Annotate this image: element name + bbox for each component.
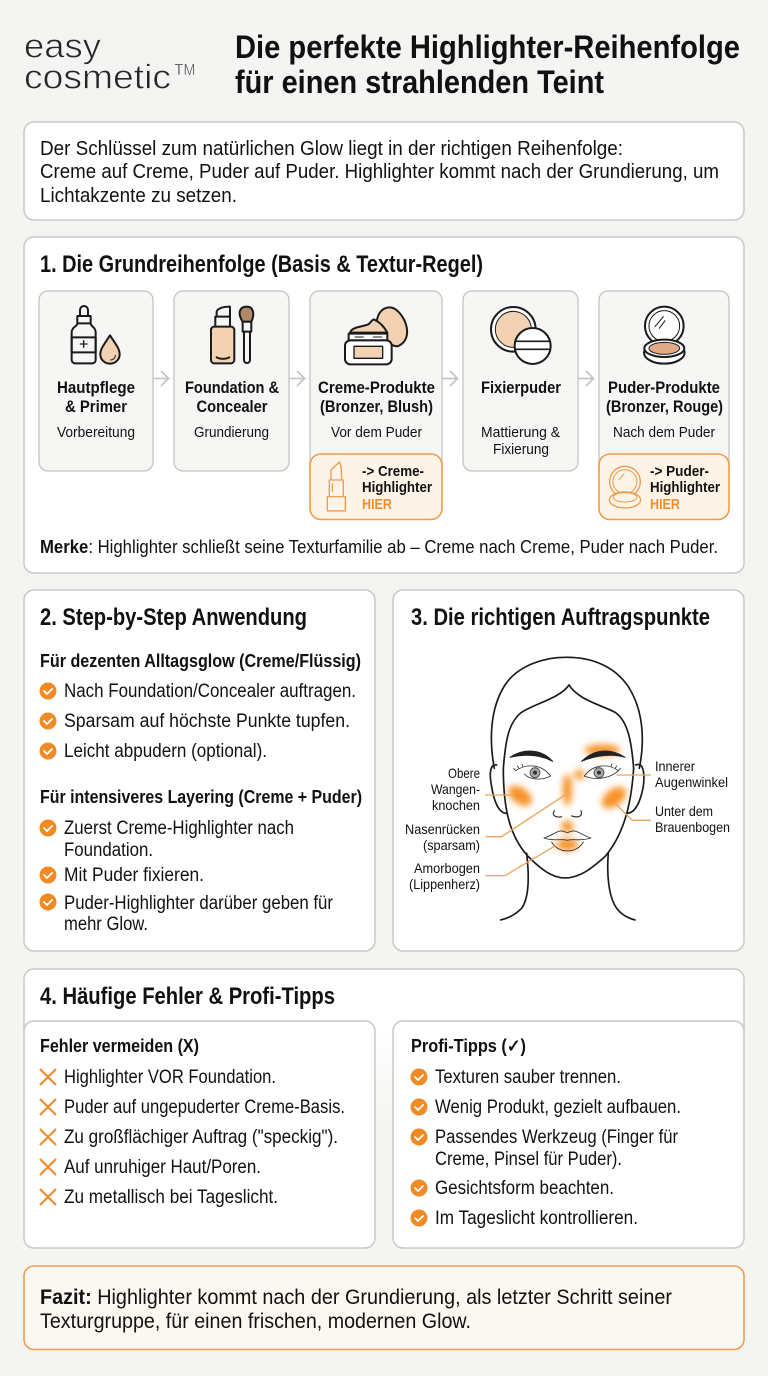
label: Innerer Augenwinkel: Innerer xyxy=(655,758,695,774)
label: Unter dem Brauenbogen xyxy=(655,803,730,835)
list item: mehr Glow. xyxy=(64,914,148,935)
step: Foundation & Concealer: Grundierung xyxy=(194,424,269,441)
step: Hautpflege & Primer: & Primer xyxy=(65,397,127,416)
list item: Puder auf ungepuderter Creme-Basis. xyxy=(64,1097,345,1118)
icon: lipstick xyxy=(327,462,345,511)
arrow xyxy=(578,371,594,386)
list item: Creme, Pinsel für Puder). xyxy=(435,1149,622,1170)
step: Hautpflege & Primer: Vorbereitung xyxy=(57,424,135,441)
label: Nasenrücken: Nasenrücken xyxy=(405,821,480,837)
list item: Auf unruhiger Haut/Poren. xyxy=(64,1157,261,1178)
callout: Creme-Highlighter hier xyxy=(310,454,442,520)
label: Innerer Augenwinkel: Augenwinkel xyxy=(655,774,728,790)
callout: Puder-Highlighter hier xyxy=(599,454,729,520)
step: Puder-Produkte: (Bronzer, Rouge) xyxy=(606,397,723,416)
label: Nasenrücken: (sparsam) xyxy=(423,837,480,853)
label: Amorbogen: Amorbogen xyxy=(414,860,480,876)
title: für einen strahlenden Teint xyxy=(235,64,604,100)
list item: Zu großflächiger Auftrag ("speckig"). xyxy=(64,1127,338,1148)
callout: Creme-Highlighter hier: Highlighter xyxy=(362,479,432,496)
label: Obere Wangenknochen xyxy=(431,765,480,813)
callout: Puder-Highlighter hier: HIER xyxy=(650,496,680,513)
callout: Puder-Highlighter hier: -> Puder- xyxy=(650,463,709,480)
list item: Wenig Produkt, gezielt aufbauen. xyxy=(435,1097,681,1118)
label: Amorbogen xyxy=(409,860,480,892)
list item: Zuerst Creme-Highlighter nach xyxy=(64,818,294,839)
icon: compact outline xyxy=(609,466,641,508)
label: Obere Wangenknochen: Obere xyxy=(448,765,480,781)
step: Fixierpuder xyxy=(463,291,578,471)
step: Fixierpuder: Mattierung & xyxy=(481,424,560,441)
label: Amorbogen: (Lippenherz) xyxy=(409,876,480,892)
step: Creme-Produkte: Vor dem Puder xyxy=(331,424,422,441)
label: Obere Wangenknochen: Wangen- xyxy=(431,781,480,797)
label: Unter dem Brauenbogen: Brauenbogen xyxy=(655,819,730,835)
step: Foundation & Concealer: Foundation & xyxy=(185,378,279,397)
panel: 2. Step-by-Step xyxy=(24,590,375,951)
step: Fixierpuder: Fixierpuder xyxy=(481,378,561,397)
sub-panel: Profi-Tipps xyxy=(393,1021,744,1248)
step: Creme-Produkte: (Bronzer, Blush) xyxy=(320,397,433,416)
arrow xyxy=(153,371,168,386)
list item: Sparsam auf höchste Punkte tupfen. xyxy=(64,711,350,732)
list item: Texturen sauber trennen. xyxy=(435,1067,621,1088)
callout: Creme-Highlighter hier: HIER xyxy=(362,496,392,513)
icon: cream jar and sponge xyxy=(345,307,407,364)
heading: section 2: 2. Step-by-Step Anwendung xyxy=(40,604,307,631)
label: Obere Wangenknochen: knochen xyxy=(432,797,480,813)
step: Hautpflege & Primer xyxy=(39,291,153,471)
list item: Passendes Werkzeug (Finger für xyxy=(435,1127,679,1148)
callout: Puder-Highlighter hier: Highlighter xyxy=(650,479,720,496)
label: Nasenrücken xyxy=(405,821,480,853)
icon: compact xyxy=(644,307,685,364)
arrow xyxy=(442,371,458,386)
nose xyxy=(553,811,582,817)
logo: easy cosmetic: cosmetic xyxy=(24,58,171,96)
list item: Im Tageslicht kontrollieren. xyxy=(435,1208,638,1229)
callout: Creme-Highlighter hier: -> Creme- xyxy=(362,463,424,480)
step: Fixierpuder: Fixierung xyxy=(493,441,549,458)
step: Foundation & Concealer xyxy=(174,291,289,471)
head outline xyxy=(490,657,644,920)
text: Merke: Merke: Highlighter schließt seine Texturfamilie ab – Creme nach Creme, Puder nach Puder. xyxy=(40,537,718,557)
panel: 1. Grundreihenfolge xyxy=(24,237,744,573)
label: Innerer Augenwinkel xyxy=(655,758,728,790)
subheading: Alltagsglow: Für dezenten Alltagsglow (Creme/Flüssig) xyxy=(40,651,361,671)
logo: easy cosmetic: easy xyxy=(24,28,102,66)
lips xyxy=(544,831,591,851)
panel: intro xyxy=(24,122,744,220)
icon: foundation bottle and brush xyxy=(211,307,253,363)
list item: Nach Foundation/Concealer auftragen. xyxy=(64,681,356,702)
panel: Fazit: Fazit: Highlighter kommt nach der Grundierung, als letzter Schritt seiner xyxy=(40,1286,672,1309)
step: Puder-Produkte: Puder-Produkte xyxy=(608,378,720,397)
face diagram xyxy=(485,657,651,920)
panel: 3. Auftragspunkte xyxy=(393,590,744,951)
list item: Mit Puder fixieren. xyxy=(64,865,204,886)
step: Puder-Produkte xyxy=(599,291,729,520)
heading: section 3: 3. Die richtigen Auftragspunkte xyxy=(411,604,710,631)
arrow xyxy=(289,371,304,386)
subheading: Layering: Für intensiveres Layering (Creme + Puder) xyxy=(40,787,362,807)
list item: Highlighter VOR Foundation. xyxy=(64,1067,276,1088)
panel: Fazit: Texturgruppe, für einen frischen, modernen Glow. xyxy=(40,1310,471,1333)
step: Foundation & Concealer: Concealer xyxy=(196,397,268,416)
step: Creme-Produkte xyxy=(310,291,442,520)
list item xyxy=(40,818,294,861)
list item xyxy=(410,1127,679,1170)
icon: serum bottle and drop xyxy=(72,306,120,364)
icon: powder and puff xyxy=(491,307,551,364)
list item: Zu metallisch bei Tageslicht. xyxy=(64,1187,278,1208)
sub-panel: Profi-Tipps: Profi-Tipps (✓) xyxy=(411,1036,526,1056)
logo: easy cosmetic xyxy=(24,28,196,96)
list item: Puder-Highlighter darüber geben für xyxy=(64,893,334,914)
label: Unter dem Brauenbogen: Unter dem xyxy=(655,803,713,819)
list item: Foundation. xyxy=(64,840,153,861)
list item: Leicht abpudern (optional). xyxy=(64,741,267,762)
panel: intro: Lichtakzente zu setzen. xyxy=(40,185,237,207)
step: Creme-Produkte: Creme-Produkte xyxy=(318,378,435,397)
sub-panel: Fehler vermeiden xyxy=(24,1021,375,1248)
step: Puder-Produkte: Nach dem Puder xyxy=(613,424,715,441)
leader lines xyxy=(485,775,651,876)
heading: section 4: 4. Häufige Fehler & Profi-Tipps xyxy=(40,983,335,1010)
panel: 4. Fehler & Tipps xyxy=(24,969,744,1248)
panel: intro: Creme auf Creme, Puder auf Puder. Highlighter kommt nach der Grundierung, um xyxy=(40,161,719,183)
step: Hautpflege & Primer: Hautpflege xyxy=(57,378,135,397)
panel: intro: Der Schlüssel zum natürlichen Glow liegt in der richtigen Reihenfolge: xyxy=(40,138,623,160)
highlight glow areas xyxy=(504,744,630,851)
logo: easy cosmetic: TM xyxy=(174,62,196,79)
list item: Gesichtsform beachten. xyxy=(435,1178,614,1199)
eyebrows xyxy=(510,751,625,761)
panel: Fazit xyxy=(24,1266,744,1350)
sub-panel: Fehler vermeiden: Fehler vermeiden (X) xyxy=(40,1036,199,1056)
title xyxy=(235,29,740,100)
list item xyxy=(40,893,334,935)
eyes xyxy=(514,764,620,779)
heading: section 1: 1. Die Grundreihenfolge (Basis & Textur-Regel) xyxy=(40,251,483,278)
